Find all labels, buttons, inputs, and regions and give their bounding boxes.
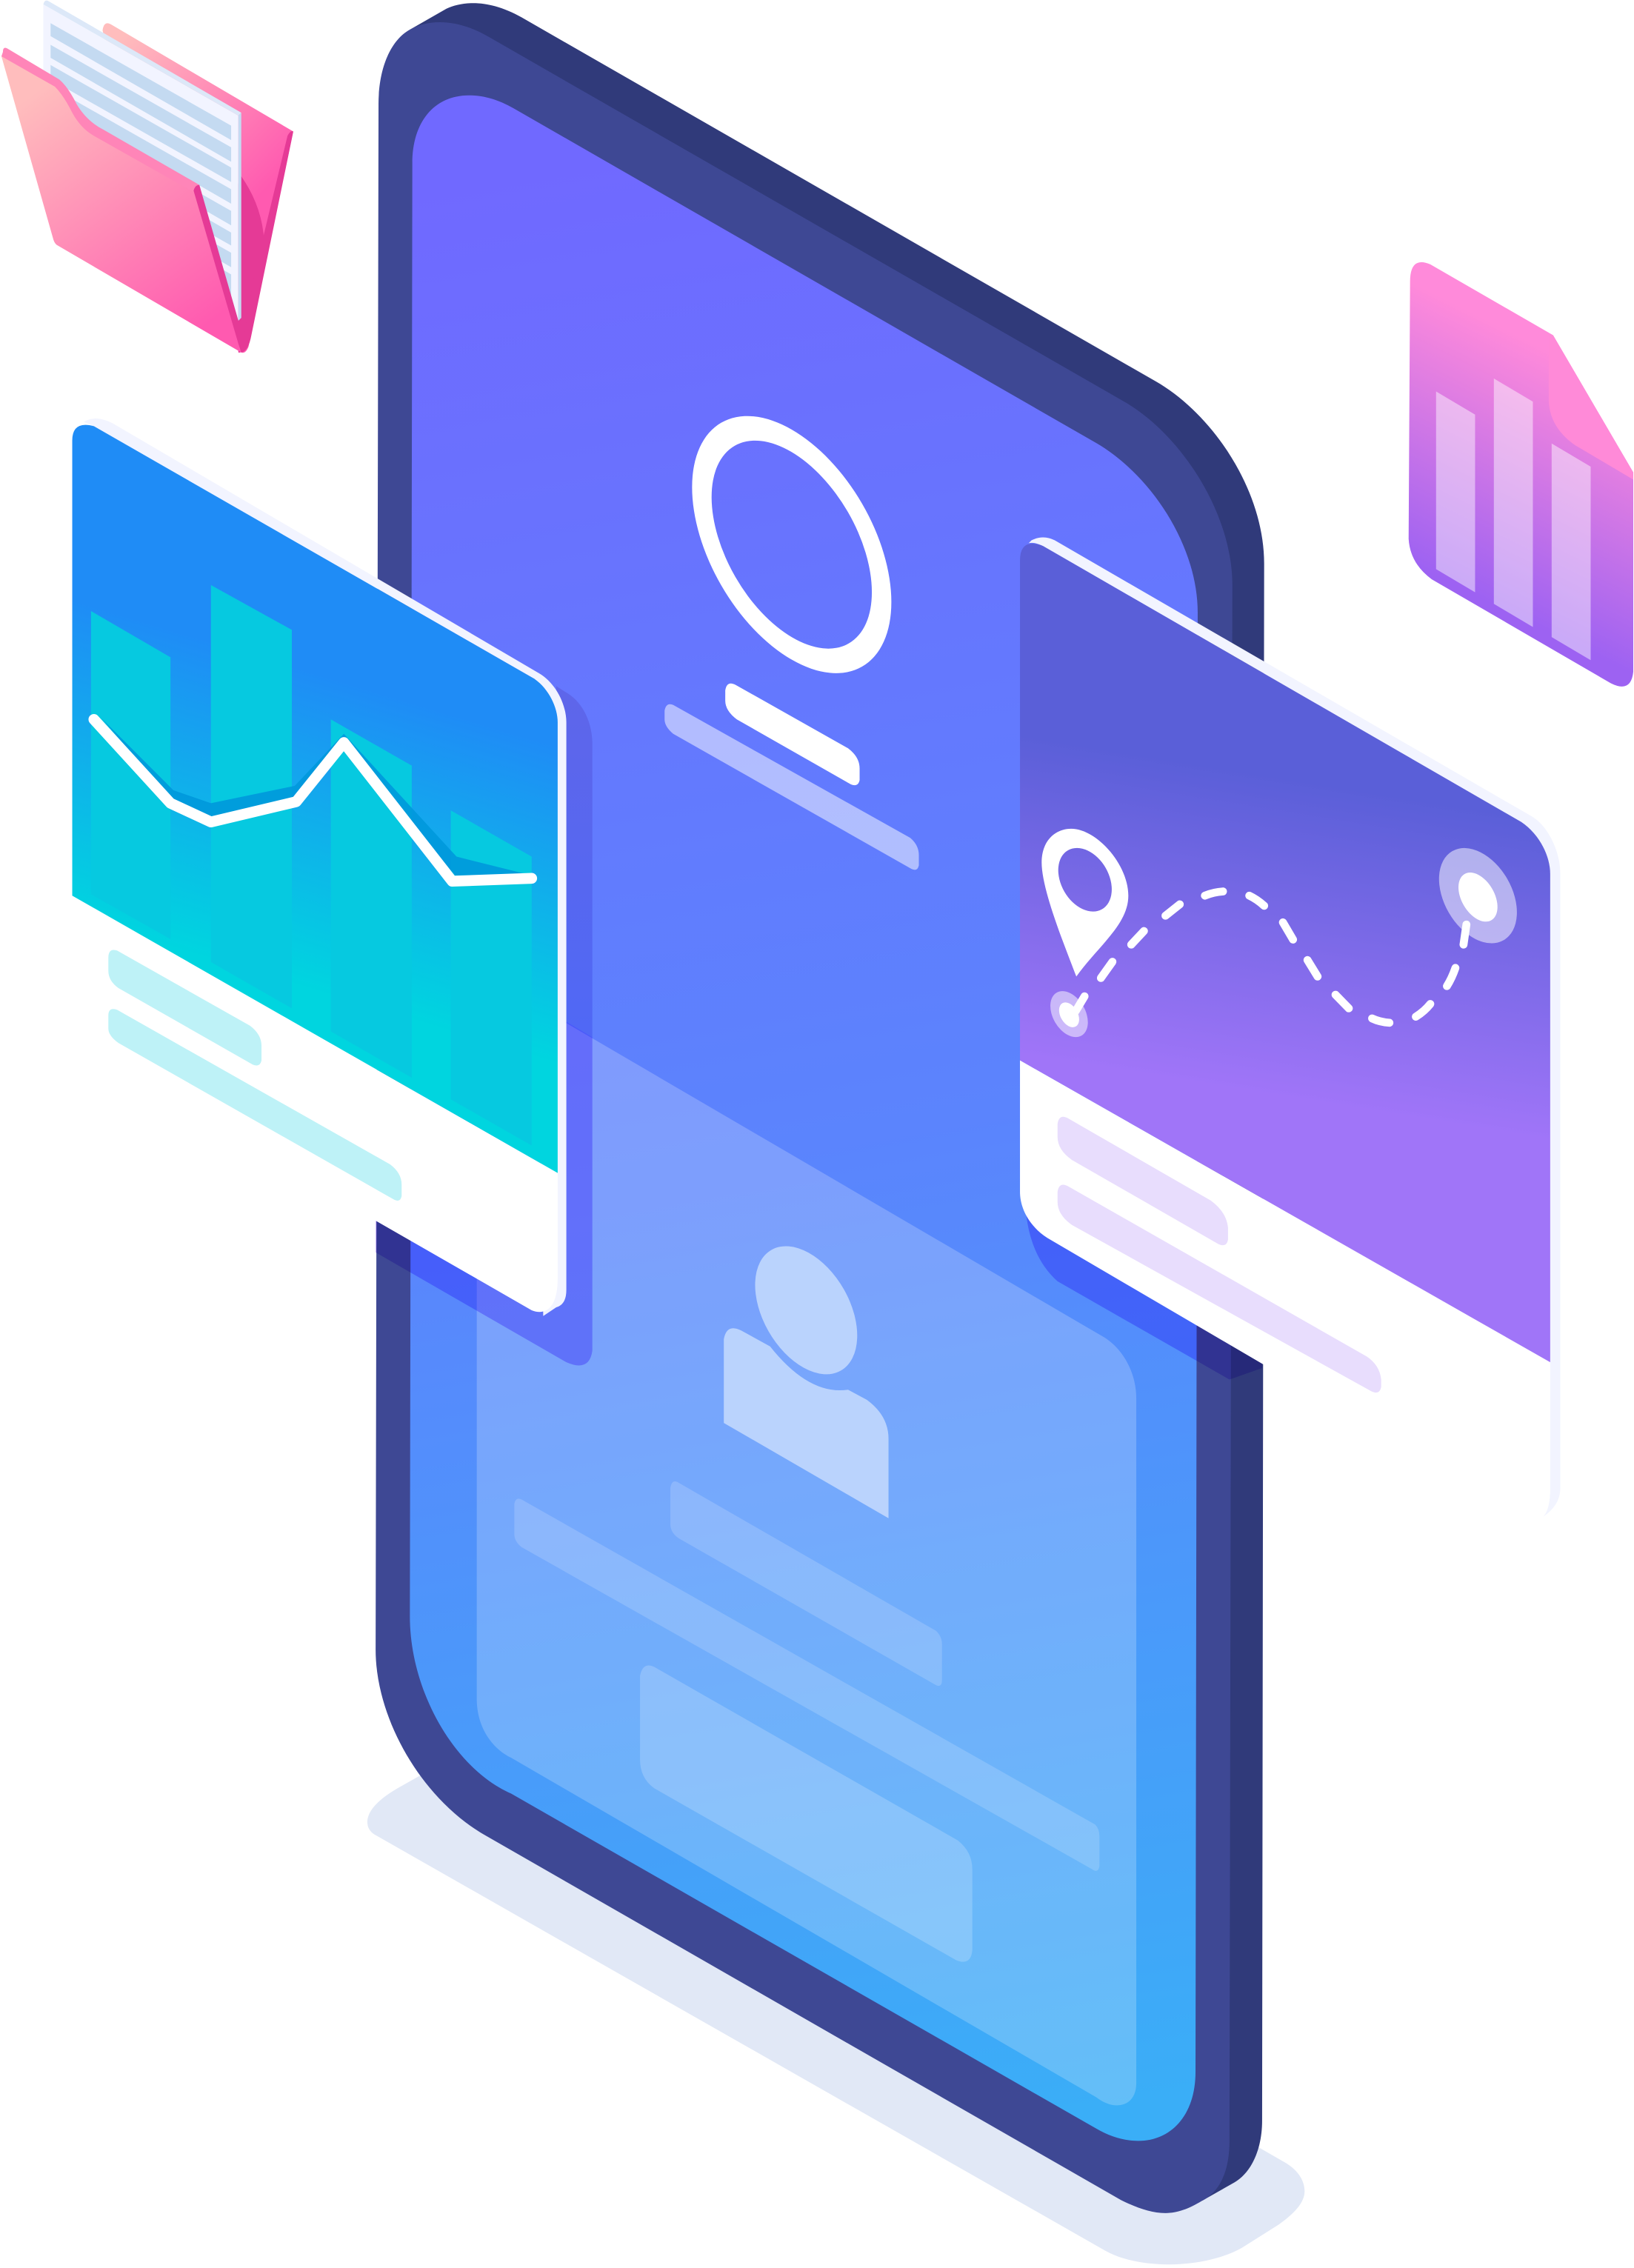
paper top edge bbox=[44, 1, 241, 116]
cyan pill long bbox=[108, 1009, 401, 1201]
folder inner fold bbox=[231, 176, 264, 353]
document bar chart icon bbox=[1409, 262, 1633, 687]
icon: person bbox=[724, 1246, 889, 1518]
purple pill short bbox=[1058, 1117, 1228, 1245]
folder back edge bbox=[241, 131, 293, 353]
white name pill bbox=[725, 684, 860, 785]
map card side edge bbox=[1029, 538, 1561, 1517]
folder back panel bbox=[102, 23, 293, 353]
shadow of chart card lower bbox=[376, 1015, 593, 1365]
cyan pill short bbox=[108, 950, 261, 1065]
folder lip bbox=[1, 48, 199, 192]
chart card bbox=[73, 418, 567, 1316]
folder icon bbox=[1, 1, 293, 353]
document bars bbox=[1436, 378, 1590, 660]
paper sheet bbox=[44, 4, 239, 321]
paper side edge bbox=[239, 113, 241, 321]
panel pill: short bbox=[670, 1481, 942, 1686]
shadow of map card bbox=[1026, 1155, 1262, 1380]
purple pill long bbox=[1058, 1184, 1381, 1393]
folder front edge bbox=[193, 185, 241, 353]
map face bbox=[1020, 544, 1550, 1362]
light subtitle pill bbox=[664, 704, 919, 870]
destination dot bbox=[1439, 848, 1517, 943]
map card bbox=[1020, 538, 1561, 1517]
origin dot bbox=[1050, 991, 1088, 1037]
dashed route bbox=[1076, 892, 1467, 1023]
folder front panel bbox=[1, 52, 241, 353]
phone front frame bbox=[376, 22, 1233, 2213]
phone side wall bbox=[410, 3, 1264, 2201]
chart face bbox=[73, 425, 558, 1173]
phone screen bbox=[410, 96, 1198, 2141]
document page bbox=[1409, 262, 1633, 687]
page fold bbox=[1549, 335, 1633, 480]
card white body bbox=[73, 895, 558, 1312]
paper text lines bbox=[50, 23, 231, 296]
line chart shade bbox=[101, 718, 532, 875]
icon: map pin bbox=[1041, 829, 1128, 976]
card side edge bbox=[84, 418, 567, 1316]
map card white body bbox=[1020, 1061, 1550, 1517]
panel block bbox=[640, 1665, 973, 1962]
line chart bbox=[94, 719, 532, 881]
translucent profile panel bbox=[477, 971, 1136, 2105]
avatar ring bbox=[692, 416, 891, 673]
ground shadow bbox=[367, 1775, 1304, 2264]
shadow of chart card upper bbox=[556, 686, 593, 1037]
bar chart bbox=[91, 585, 532, 1146]
panel pill: long bbox=[514, 1498, 1099, 1871]
phone bbox=[376, 3, 1264, 2213]
